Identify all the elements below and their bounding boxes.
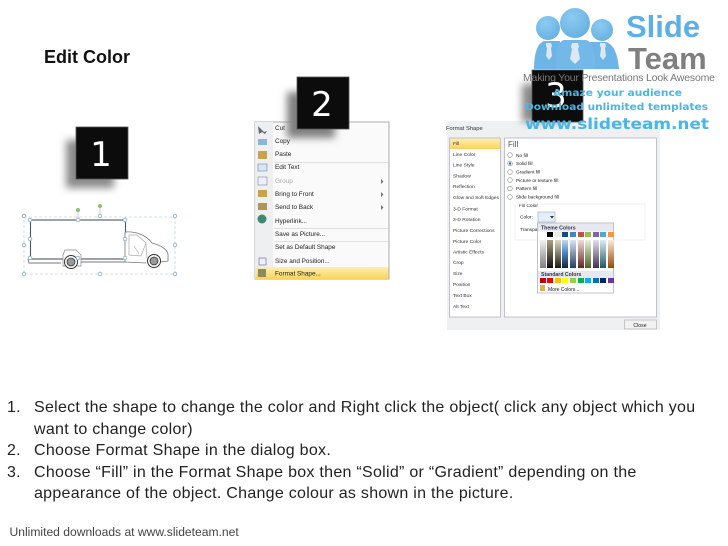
dialog window: Position [453, 282, 471, 288]
dialog window: Size [453, 271, 463, 277]
footer: Unlimited downloads at www.slideteam.net [10, 525, 239, 539]
panel: step 1 truck shape [22, 127, 177, 276]
watermark text: Download unlimited templates [525, 102, 708, 113]
dialog window: Format Shape [446, 126, 483, 132]
watermark text: Amaze your audience [553, 88, 682, 99]
context menu: Group [275, 178, 293, 185]
dialog window: Line Color [453, 152, 476, 158]
truck illustration [22, 204, 177, 276]
instructions list: Choose Format Shape in the dialog box. [34, 442, 331, 459]
panel: step 3 format shape dialog [446, 70, 660, 330]
context menu: Bring to Front [275, 191, 314, 198]
dialog window: Pattern fill [516, 186, 537, 192]
logo: SlideTeam watermark [523, 8, 715, 133]
colour picker [538, 223, 614, 293]
context menu: Format Shape... [275, 270, 321, 278]
dialog window: Picture Color [453, 239, 482, 245]
watermark text [525, 88, 710, 133]
context menu: Copy [275, 138, 291, 145]
dialog window: Artistic Effects [453, 250, 484, 256]
dialog window: Alt Text [453, 304, 470, 310]
dialog window: No fill [516, 153, 528, 159]
instructions list: 1. [7, 399, 21, 416]
context menu: Set as Default Shape [275, 244, 336, 251]
colour picker: More Colors... [548, 287, 579, 293]
title: Edit Color [44, 47, 130, 67]
dialog window: Transpa [520, 227, 538, 233]
badge 2 [287, 77, 349, 138]
context menu: Save as Picture... [275, 231, 325, 238]
logo tagline: Making Your Presentations Look Awesome [523, 72, 715, 84]
badge 2: 2 [311, 85, 333, 125]
dialog window: Picture Corrections [453, 228, 495, 234]
dialog window: Gradient fill [516, 170, 540, 176]
logo: SlideTeam watermark: Team [628, 41, 707, 76]
badge 3 [522, 70, 583, 122]
dialog window: 3-D Rotation [453, 217, 481, 223]
badge 1: 1 [90, 135, 112, 175]
dialog window: Fill [508, 140, 518, 149]
icon: three people [534, 8, 619, 69]
context menu: Send to Back [275, 204, 314, 211]
colour picker: Theme Colors [541, 226, 576, 232]
dialog window: Fill [453, 141, 459, 147]
dialog window: Close [633, 323, 647, 329]
context menu: Hyperlink... [275, 218, 307, 225]
instructions list: 3. [7, 464, 21, 481]
badge 3 numeral: 3 [545, 76, 567, 116]
context menu [255, 122, 389, 279]
panel: step 2 context menu [255, 77, 389, 279]
dialog window: Slide background fill [516, 194, 559, 200]
dialog window: Crop [453, 260, 464, 266]
dialog window: 3-D Format [453, 206, 478, 212]
dialog window: Text Box [453, 293, 472, 299]
dialog window: Glow and Soft Edges [453, 195, 499, 201]
dialog window: Color: [520, 214, 533, 220]
instructions list: 2. [7, 442, 21, 459]
context menu: Cut [275, 125, 285, 132]
dialog window: Fill Color [519, 203, 538, 209]
dialog window: Picture or texture fill [516, 178, 558, 184]
instructions list: want to change color) [34, 421, 193, 438]
context menu: Size and Position... [275, 258, 330, 265]
context menu: Paste [275, 151, 292, 158]
dialog window: Solid fill [516, 161, 533, 167]
instructions list: appearance of the object. Change colour as shown in the picture. [34, 485, 514, 502]
colour picker: Standard Colors [541, 272, 581, 278]
badge 1 [66, 127, 128, 188]
instructions list: Choose “Fill” in the Format Shape box then “Solid” or “Gradient” depending on the [34, 464, 637, 481]
dialog window: Shadow [453, 174, 471, 180]
dialog window: Reflection [453, 184, 475, 190]
dialog window: Line Style [453, 162, 475, 168]
instructions list [7, 399, 695, 502]
dialog window [446, 121, 660, 330]
instructions list: Select the shape to change the color and Right click the object( click any object which you [34, 399, 695, 416]
context menu: Edit Text [275, 164, 300, 171]
logo wordmark: Slide [626, 9, 700, 44]
watermark text: www.slideteam.net [525, 115, 710, 133]
